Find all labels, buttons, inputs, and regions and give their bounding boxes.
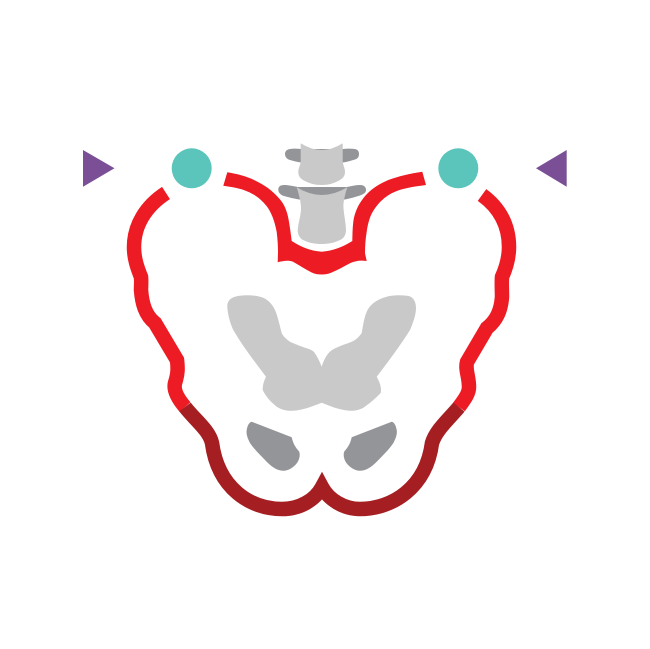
lower vertebra transverse processes <box>278 185 366 200</box>
left teal marker <box>172 148 212 188</box>
pelvic inlet arch <box>223 172 426 274</box>
icon: lumbar vertebrae <box>278 143 366 244</box>
lower vertebra body <box>297 187 347 244</box>
left purple arrow <box>83 150 114 187</box>
upper vertebra body <box>298 143 345 185</box>
right purple arrow <box>536 150 567 187</box>
icon: left ischium <box>247 422 300 471</box>
icon: right ischium <box>344 422 397 471</box>
upper vertebra transverse processes <box>285 149 359 162</box>
lower pelvic outline, dark red <box>185 407 459 509</box>
right pelvic outline, bright red <box>459 195 509 407</box>
right teal marker <box>438 148 478 188</box>
icon: sacrum <box>227 295 416 411</box>
left pelvic outline, bright red <box>134 193 185 407</box>
